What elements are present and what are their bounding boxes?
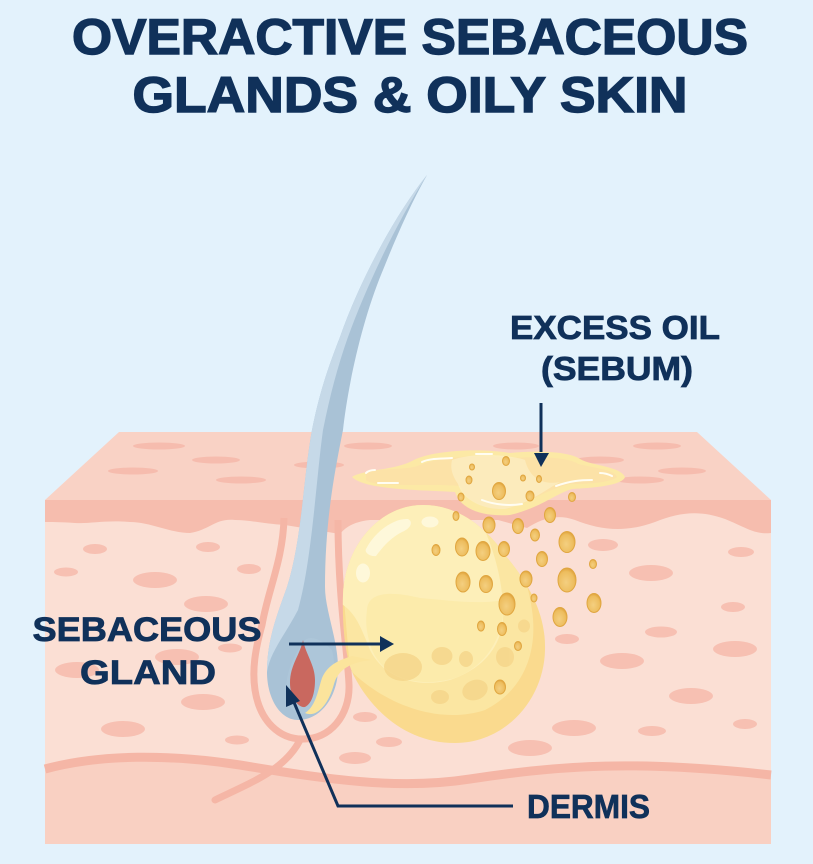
arrow: excess oil (534, 403, 549, 467)
sebum droplets (432, 456, 601, 694)
arrow: sebaceous gland (289, 636, 394, 652)
dermis front face (45, 500, 771, 844)
excess oil pool (352, 450, 625, 515)
hair bulb papilla (290, 640, 315, 707)
gland spots (384, 620, 530, 704)
hair root blood vessel (215, 740, 300, 800)
skin surface top face (45, 432, 771, 500)
title (72, 9, 748, 123)
label: sebaceous gland: GLAND (80, 654, 216, 692)
panel: skin cross-section block (45, 175, 771, 844)
label: excess oil: (SEBUM) (541, 350, 693, 387)
oil duct (305, 656, 372, 714)
dermis boundary line (45, 757, 771, 784)
hair shaft (267, 175, 427, 720)
follicle sheath (254, 518, 349, 739)
lower dermis layer (45, 758, 771, 844)
label: sebaceous gland (32, 611, 262, 692)
title: GLANDS & OILY SKIN (132, 67, 688, 123)
label: excess oil: EXCESS OIL (510, 309, 720, 346)
dermis cells (54, 539, 757, 764)
label: dermis: DERMIS (527, 788, 650, 825)
label: excess oil (510, 309, 720, 387)
epidermis layer (45, 500, 771, 534)
arrow: dermis (286, 685, 513, 806)
title: OVERACTIVE SEBACEOUS (72, 9, 748, 65)
sebaceous gland (335, 495, 545, 743)
gland highlights (356, 516, 438, 582)
label: sebaceous gland: SEBACEOUS (32, 611, 262, 649)
